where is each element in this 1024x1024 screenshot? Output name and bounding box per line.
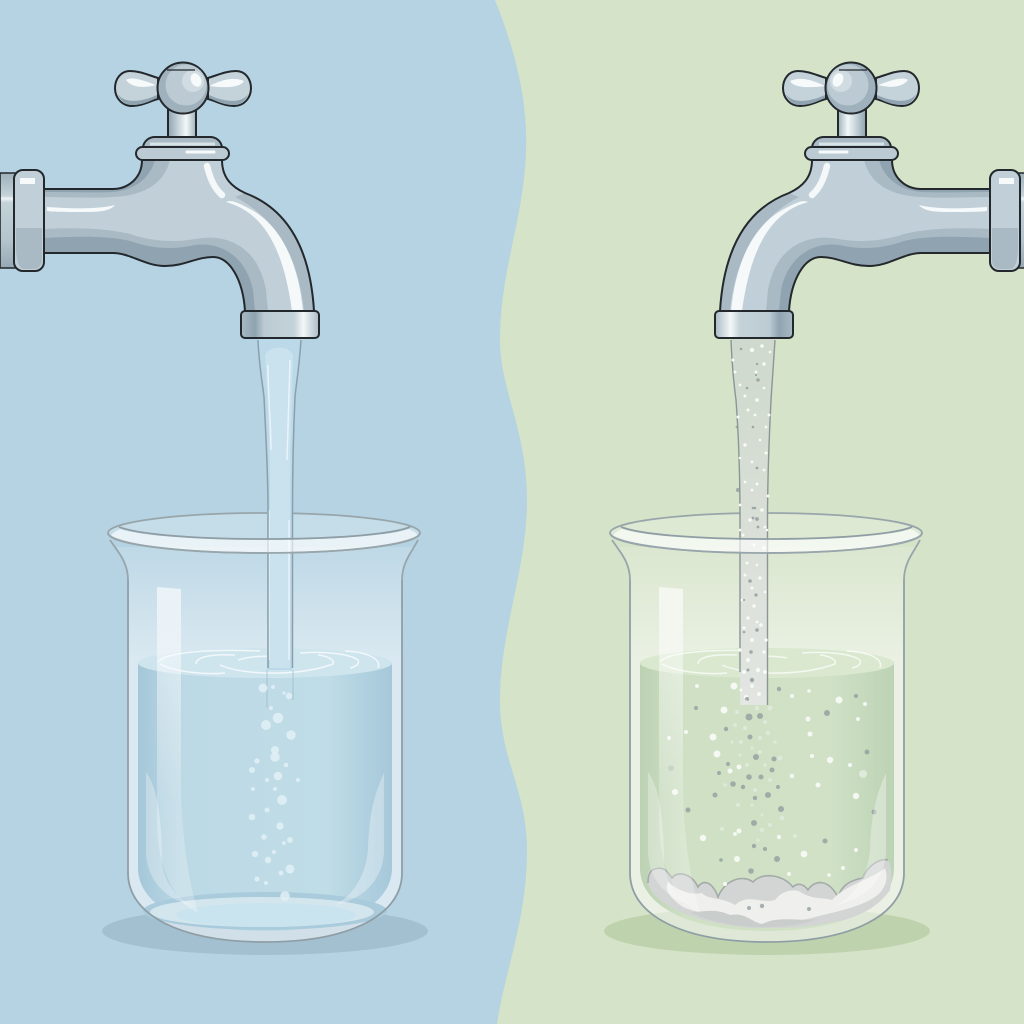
glass highlights and rim left xyxy=(108,527,420,942)
left beaker with clear water xyxy=(108,338,420,942)
left beaker shadow xyxy=(102,907,428,955)
clear stream xyxy=(258,338,301,708)
background: hard water panel with wavy divider xyxy=(495,0,1024,1024)
grey particles xyxy=(668,687,876,911)
fine plume particles xyxy=(720,700,797,842)
glass body right xyxy=(610,513,922,942)
white particles xyxy=(667,682,867,886)
cloudy water xyxy=(640,662,894,931)
clear water xyxy=(138,662,392,931)
right faucet xyxy=(715,62,1024,338)
water surface xyxy=(138,648,392,678)
water bottom pool xyxy=(143,892,387,930)
left faucet xyxy=(0,62,319,338)
water surface right xyxy=(640,648,894,678)
stream grains white xyxy=(732,344,771,699)
mineral sediment xyxy=(648,860,891,928)
right beaker with cloudy water xyxy=(610,338,922,942)
right beaker shadow xyxy=(604,907,930,955)
stream grains grey xyxy=(736,348,760,701)
glass body left xyxy=(108,513,420,942)
bubbles xyxy=(249,684,300,901)
glass highlights and rim right xyxy=(610,527,922,942)
mineral stream xyxy=(731,338,775,705)
